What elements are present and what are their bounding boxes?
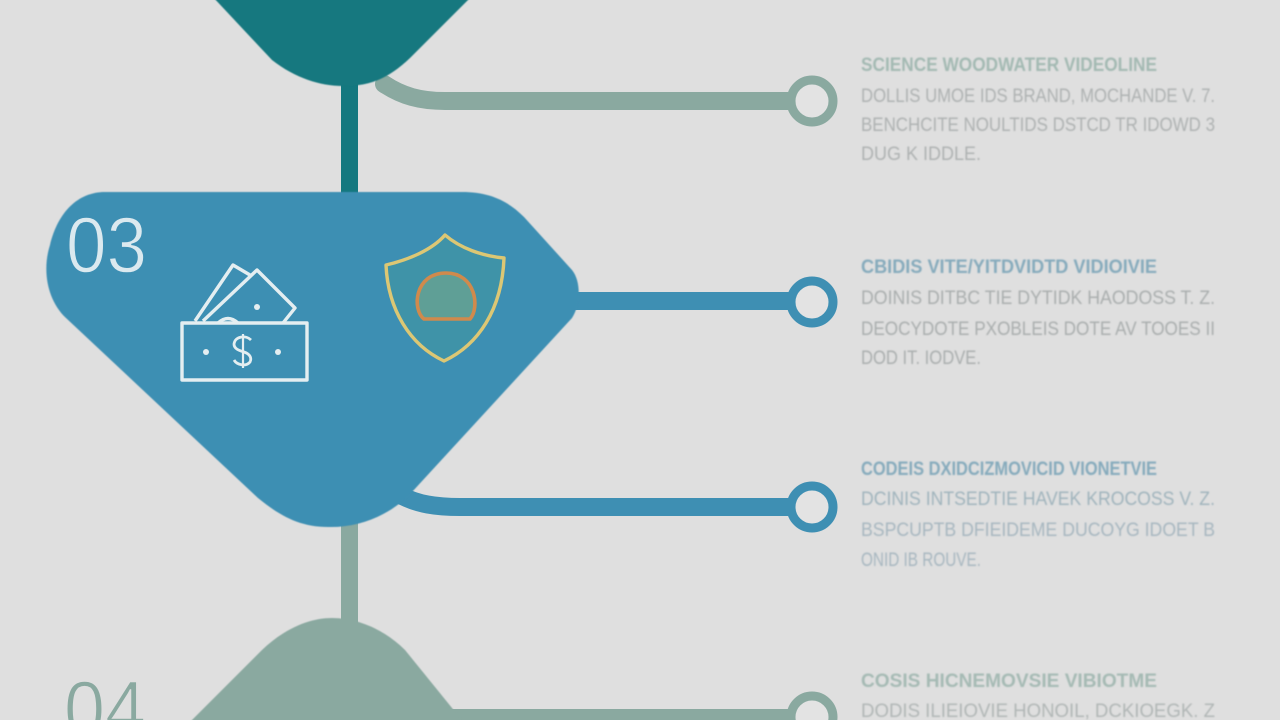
text block: step 3 first item: DOINIS DITBC TIE DYTIDK HAODOSS T. Z. [861, 288, 1215, 309]
text block: step 3 first item: CBIDIS VITE/YITDVIDTD VIDIOIVIE [861, 257, 1157, 278]
text block: step 3 first item: DEOCYDOTE PXOBLEIS DOTE AV TOOES II [861, 319, 1215, 340]
text block: step 3 second item: CODEIS DXIDCIZMOVICID VIONETVIE [861, 459, 1157, 480]
step 3 upper connector [570, 281, 833, 323]
text block: step 2: BENCHCITE NOULTIDS DSTCD TR IDOWD 3 [861, 115, 1215, 136]
text block: step 3 second item: ONID IB ROUVE. [861, 550, 981, 571]
text block: step 3 second item: DCINIS INTSEDTIE HAVEK KROCOSS V. Z. [861, 489, 1215, 510]
text block: step 4 [861, 671, 1215, 720]
text block: step 3 second item: BSPCUPTB DFIEIDEME DUCOYG IDOET B [861, 520, 1215, 541]
text block: step 3 first item [861, 257, 1215, 369]
stem: teal between steps 2 and 3 [341, 80, 358, 196]
icon: shield [386, 235, 504, 361]
step 2 connector [384, 80, 833, 122]
step 4 shape [64, 618, 465, 720]
text block: step 3 second item [861, 459, 1215, 571]
step number 03: 03 [66, 200, 147, 289]
text block: step 2: DUG K IDDLE. [861, 144, 981, 165]
text block: step 4: COSIS HICNEMOVSIE VIBIOTME [861, 671, 1157, 692]
text block: step 3 first item: DOD IT. IODVE. [861, 348, 981, 369]
step 4 connector [440, 696, 833, 720]
panel: step 3 shape [46, 192, 579, 527]
text block: step 2: DOLLIS UMOE IDS BRAND, MOCHANDE V. 7. [861, 86, 1215, 107]
icon: money bills [182, 265, 307, 380]
text block: step 2: SCIENCE WOODWATER VIDEOLINE [861, 55, 1157, 76]
step 3 lower connector [402, 486, 833, 528]
stem: green between steps 3 and 4 [341, 520, 358, 624]
text block: step 2 [861, 55, 1215, 165]
step 2 shape: teal [212, 0, 472, 86]
